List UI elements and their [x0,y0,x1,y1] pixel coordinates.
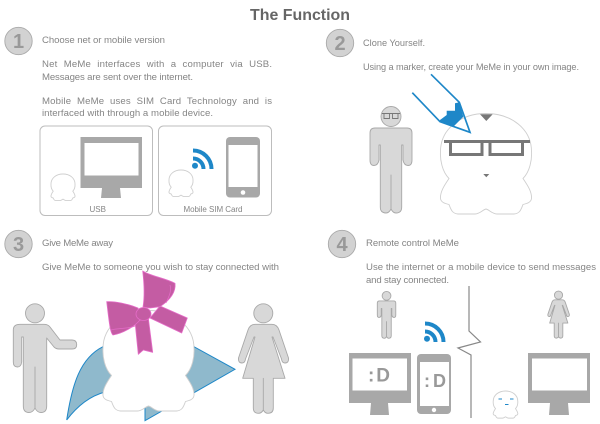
monitor blank [528,353,590,415]
arrow: blue swoosh [67,347,235,421]
step 1 heading: Choose net or mobile version [42,35,165,46]
icon: monitor [80,137,142,198]
step 1 text: mobile [42,96,272,119]
step 1 text: net [42,59,272,83]
panel: step 1 [5,27,272,215]
step 1 text: mobile: interfaced with through a mobile device. [42,108,213,119]
step 4 heading: Remote control MeMe [366,238,459,249]
step 3 number badge [5,230,32,258]
icon: phone [226,137,260,198]
step 1 text: net: Net MeMe interfaces with a computer via USB. [42,59,272,70]
step 3 text: Give MeMe to someone you wish to stay connected with [42,262,279,273]
step 2 number badge: 2 [334,33,346,55]
step 2 number badge [326,29,354,57]
USB option box [40,126,152,216]
glasses [444,142,530,154]
title: The Function [250,7,350,24]
man offering [13,304,77,412]
icon: wifi [192,150,212,169]
icon: wifi [424,324,444,342]
Mobile SIM option box [158,126,272,216]
step 4 text: and stay connected. [366,275,449,286]
eye marks [480,114,493,177]
monitor with smiley [349,353,411,415]
icon: small MeMe [51,174,75,201]
divider: jagged separation line [458,286,480,418]
step 4 text: Use the internet or a mobile device to send messages [366,262,596,273]
large MeMe with glasses [440,114,532,214]
step 4 number badge [328,230,356,258]
panel: step 2 [326,29,579,214]
panel: step 4 [328,230,596,418]
phone with smiley [417,354,451,414]
icon: small MeMe [169,170,193,197]
arrow: blue marker [412,74,470,132]
step 4 text [366,262,596,286]
phone with smiley: : D [424,371,446,391]
step 4 number badge: 4 [336,234,348,256]
Mobile SIM Card label: Mobile SIM Card [184,205,242,214]
pink bow [107,271,187,354]
step 1 text: net: Messages are sent over the internet. [42,72,193,83]
step 1 number badge: 1 [13,31,24,53]
woman [238,304,289,413]
white MeMe gift [103,310,194,411]
step 1 text: mobile: Mobile MeMe uses SIM Card Technology and is [42,96,272,107]
small man [377,291,396,338]
step 2 text: Using a marker, create your MeMe in your own image. [363,62,579,72]
panel: step 3 [5,230,289,421]
small woman [548,291,569,338]
monitor with smiley: : D [368,366,390,386]
step 2 heading: Clone Yourself. [363,38,425,48]
step 3 heading: Give MeMe away [42,238,113,249]
small MeMe with blue face [493,391,518,418]
man figure with glasses [370,106,412,213]
USB label: USB [90,205,106,214]
step 1 number badge [5,27,32,55]
step 3 number badge: 3 [13,234,24,256]
